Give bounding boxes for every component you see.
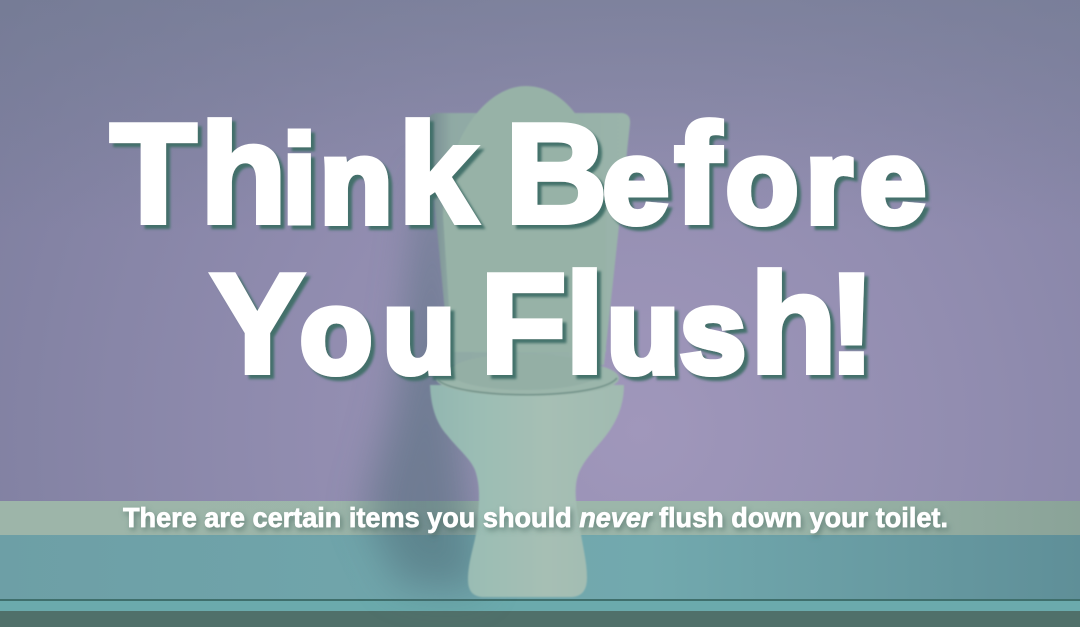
- toilet tank: [427, 113, 630, 365]
- toilet shadow on wall and floor: [365, 170, 480, 590]
- toilet seat: [436, 358, 619, 396]
- toilet lid: [443, 86, 606, 352]
- floor band: [0, 501, 1080, 627]
- seat rim line: [438, 378, 617, 395]
- seat inner opening: [449, 354, 601, 390]
- illustration: toilet: [427, 86, 630, 597]
- title: You Flush!: [210, 244, 875, 404]
- toilet bowl and pedestal: [430, 385, 624, 597]
- title: [110, 94, 926, 404]
- subtitle: There are certain items you should never flush down your toilet.: [123, 502, 948, 533]
- title: Think Before: [110, 94, 926, 254]
